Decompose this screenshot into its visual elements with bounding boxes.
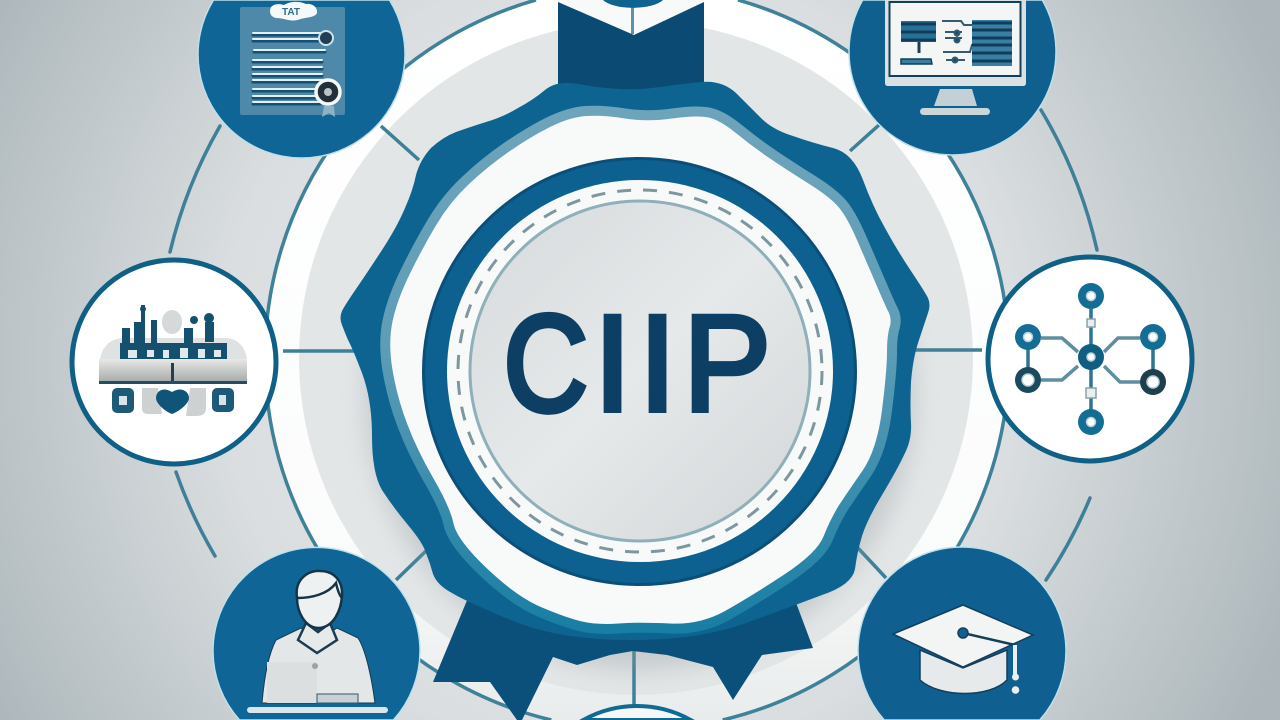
collar — [298, 623, 337, 653]
seal outer scalloped edge — [340, 82, 930, 640]
node centres — [1022, 292, 1159, 426]
title: CIIP: I — [638, 288, 677, 440]
wide white ring — [265, 0, 1009, 720]
connectors — [1028, 296, 1153, 422]
seal — [340, 82, 930, 640]
spokes linking nodes to the seal — [283, 125, 982, 706]
title: CIIP: C — [504, 287, 588, 440]
dark blue ring — [424, 158, 856, 584]
bottom ribbon tails — [433, 598, 813, 720]
desk — [247, 707, 388, 713]
platform bar — [99, 359, 247, 381]
title: CIIP — [504, 287, 771, 440]
mortarboard — [893, 605, 1033, 667]
skyline windows — [128, 348, 221, 358]
large seal — [316, 80, 340, 104]
node: network — [988, 257, 1192, 461]
seal ribbon — [322, 106, 335, 117]
link tags — [1086, 319, 1096, 398]
small seal — [319, 31, 333, 45]
button and cord — [963, 633, 1015, 645]
node: professional at laptop — [213, 547, 420, 720]
cap base — [920, 650, 1007, 694]
node: document — [198, 0, 405, 158]
title: CIIP: P — [683, 287, 771, 440]
seal shadow — [365, 120, 915, 670]
node: graduation cap — [858, 547, 1066, 720]
inner disc — [470, 201, 810, 541]
title: CIIP: I — [594, 288, 632, 440]
top ribbon and node — [558, 0, 704, 90]
screen: left panel — [901, 21, 936, 64]
screen: right table — [972, 20, 1012, 66]
grey backdrop — [100, 338, 247, 360]
node: computer monitor — [849, 0, 1056, 155]
seal white frill — [390, 116, 891, 624]
white stitched ring — [447, 180, 833, 562]
screen — [890, 2, 1020, 76]
central dome — [162, 310, 182, 334]
right box — [212, 388, 234, 412]
screen: flow nodes — [942, 21, 978, 62]
cloud header — [270, 2, 317, 21]
node: infrastructure — [72, 260, 276, 464]
document sheet — [240, 7, 345, 115]
laptop logo — [312, 663, 318, 669]
laptop — [267, 662, 317, 703]
skyline — [120, 305, 227, 363]
left box — [112, 388, 134, 413]
cloud label: TAT — [282, 7, 300, 18]
dashed stitching — [458, 190, 822, 552]
tassel — [1012, 645, 1019, 694]
keyboard — [317, 694, 358, 703]
heart shield — [156, 390, 189, 414]
monitor base — [920, 108, 990, 115]
torso — [262, 628, 375, 703]
hair line — [297, 583, 342, 598]
network nodes — [1015, 283, 1166, 435]
bottom node (cropped) — [583, 706, 691, 720]
cap button — [958, 628, 968, 638]
head — [297, 571, 342, 628]
outer connector arcs — [170, 110, 1097, 580]
checklist lines — [253, 33, 325, 104]
monitor stand — [934, 89, 977, 106]
grey supports — [142, 388, 206, 416]
monitor body — [885, 0, 1026, 86]
